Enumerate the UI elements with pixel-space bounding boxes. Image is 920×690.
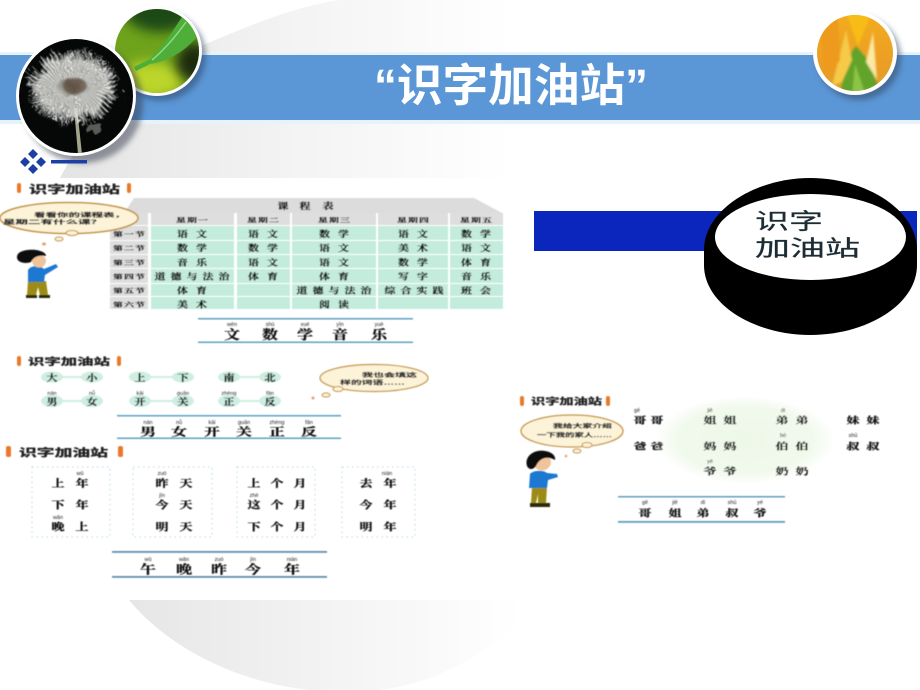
word lists: wǎn <box>52 515 63 521</box>
table cells: 第三节 <box>113 259 146 266</box>
answer word strip: yuè <box>375 322 383 328</box>
answer word strip: jiě <box>671 500 678 506</box>
word pairs: guān <box>177 391 189 397</box>
word lists: 上年昨天上个月去年 <box>52 477 397 490</box>
answer word strip <box>112 551 327 578</box>
table cells: 第五节 <box>113 287 146 294</box>
panel: timetable <box>0 182 503 343</box>
table cells: 音乐语文语文数学体育 <box>177 257 491 268</box>
word pairs: 大小上下南北 <box>47 372 275 384</box>
answer word strip: fǎn <box>305 420 313 426</box>
answer word strip: jīn <box>249 557 256 563</box>
thought bubble: 我也会填这 <box>362 371 418 379</box>
family word grid: dì <box>781 408 786 414</box>
word pairs: nán <box>47 391 57 397</box>
table title: 课程表 <box>278 200 334 212</box>
word lists: zhè <box>250 493 258 499</box>
green backdrop <box>655 396 835 484</box>
answer word strip: nǚ <box>176 419 182 426</box>
family word grid: 哥哥姐姐弟弟妹妹 <box>634 414 880 426</box>
word lists: 下年今天这个月今年 <box>52 499 397 511</box>
word pairs: 男女开关正反 <box>47 396 275 408</box>
cartoon boy <box>527 451 558 507</box>
family word grid <box>634 408 880 477</box>
word pairs: zhèng <box>222 391 236 397</box>
answer word strip: wǔ <box>143 557 152 563</box>
table header band <box>124 198 502 213</box>
answer word strip: kāi <box>208 420 216 426</box>
photo: dandelion <box>16 36 143 163</box>
badge text: 识字 <box>755 209 823 234</box>
thought bubble <box>312 364 428 400</box>
answer word strip: nán <box>143 420 153 426</box>
word lists: 晚上明天下个月明年 <box>52 521 397 533</box>
thought bubble: 星期二有什么课？ <box>3 218 103 226</box>
word lists: nián <box>382 471 392 477</box>
answer word strip: dì <box>701 500 706 506</box>
heading: 识字加油站 <box>29 182 120 196</box>
answer word strip: wǎn <box>178 557 189 563</box>
photo: green leaf <box>115 8 210 104</box>
thought bubble: 看看你的课程表， <box>34 211 126 219</box>
answer word strip: shù <box>266 322 274 328</box>
answer word strip: yīn <box>336 322 344 328</box>
badge text <box>755 209 860 261</box>
title band <box>0 52 920 124</box>
answer word strip <box>198 318 413 343</box>
word pairs <box>47 372 275 408</box>
answer word strip: 文数学音乐 <box>224 327 389 342</box>
table cells: 道德与法治体育体育写字音乐 <box>155 271 492 282</box>
word lists <box>52 471 397 533</box>
heading <box>17 356 121 368</box>
thought bubble: 样的词语…… <box>340 378 405 386</box>
white content area <box>0 178 920 600</box>
answer word strip: 男女开关正反 <box>140 425 317 438</box>
family word grid: yé <box>707 459 713 465</box>
table cells <box>110 213 503 310</box>
panel: family words <box>520 396 880 523</box>
heading <box>17 182 131 196</box>
word lists: zuó <box>158 471 166 477</box>
heading <box>6 446 123 459</box>
title: “识字加油站” <box>374 60 648 111</box>
answer word strip: wén <box>226 322 237 328</box>
family word grid: jiě <box>706 408 713 414</box>
heading: 识字加油站 <box>531 396 602 406</box>
word pairs: fǎn <box>266 391 274 397</box>
answer word strip: zhèng <box>270 420 284 426</box>
panel: time words <box>6 446 415 578</box>
photo: tulip <box>813 11 901 100</box>
thought bubble <box>0 202 138 246</box>
answer word strip <box>618 496 785 523</box>
answer word strip <box>117 415 341 439</box>
table cells: 第一节 <box>113 231 146 238</box>
answer word strip: zuó <box>215 557 223 563</box>
cartoon boy <box>17 250 58 298</box>
family word grid: 爷爷奶奶 <box>704 465 809 477</box>
answer word strip: 午晚昨今年 <box>140 562 300 577</box>
heading: 识字加油站 <box>28 356 111 368</box>
answer word strip: yé <box>757 500 763 506</box>
dotted word boxes <box>32 467 415 537</box>
black puck badge <box>704 178 917 335</box>
answer word strip: gē <box>642 500 648 506</box>
table cells: 美术阅读 <box>177 299 349 310</box>
word pairs: kāi <box>136 391 144 397</box>
table cells: 体育道德与法治综合实践班会 <box>177 285 491 296</box>
heading <box>520 396 610 406</box>
table cells: 第二节 <box>113 245 146 252</box>
badge text: 加油站 <box>755 236 860 261</box>
background: grey circle upper part <box>60 0 520 178</box>
background: grey circle lower part <box>129 600 540 690</box>
thought bubble: 我给大家介绍 <box>553 422 613 430</box>
section marker: diamonds and line <box>20 149 87 174</box>
answer word strip: shū <box>728 500 736 506</box>
thought bubble <box>521 415 623 457</box>
table cells: 语文语文数学语文数学 <box>177 229 491 240</box>
table cells: 第四节 <box>113 273 146 280</box>
table cells: 第六节 <box>113 301 146 308</box>
answer word strip: xué <box>301 322 309 328</box>
family word grid: 爸爸妈妈伯伯叔叔 <box>634 440 880 452</box>
table cells: 数学数学语文美术语文 <box>177 243 491 254</box>
panel: opposite words <box>17 356 428 439</box>
table cells: 星期一星期二星期三星期四星期五 <box>176 217 493 224</box>
answer word strip: 哥姐弟叔爷 <box>638 507 767 519</box>
family word grid: gē <box>634 408 640 414</box>
answer word strip: nián <box>287 557 297 563</box>
family word grid: bó <box>780 433 786 439</box>
blue strip <box>534 211 917 251</box>
word pairs: nǚ <box>89 390 95 397</box>
word lists: jīn <box>158 493 165 499</box>
thought bubble: 一下我的家人…… <box>537 431 612 439</box>
family word grid: shū <box>849 433 857 439</box>
word lists: wǔ <box>75 471 84 477</box>
answer word strip: guān <box>238 420 250 426</box>
heading: 识字加油站 <box>19 446 109 459</box>
word pairs highlights <box>41 372 281 407</box>
